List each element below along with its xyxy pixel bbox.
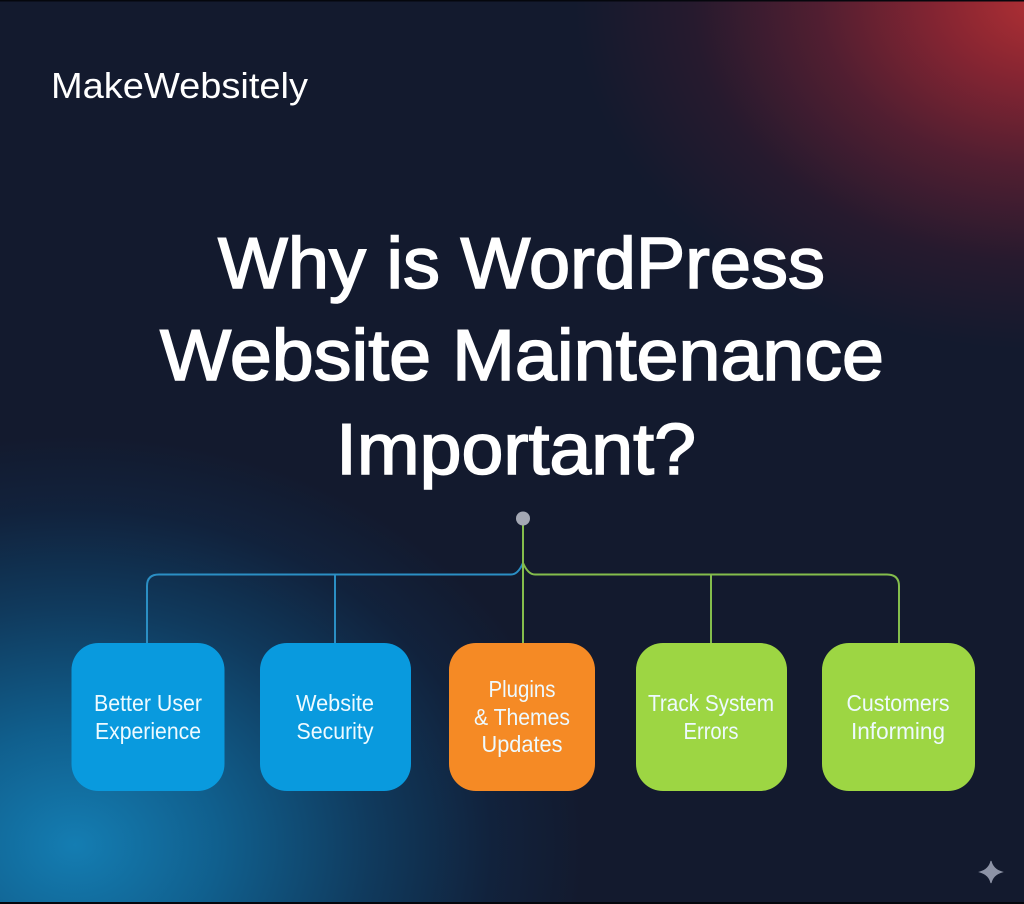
box: Customers Informing: Informing	[851, 718, 945, 744]
box: Website Security: Security	[296, 718, 374, 744]
brand name: MakeWebsitely	[51, 65, 308, 106]
box: Better User Experience: Better User	[94, 690, 202, 716]
box: Track System Errors: Errors	[684, 718, 738, 744]
box: Track System Errors	[636, 643, 787, 791]
box: Better User Experience	[72, 643, 224, 791]
box: Plugins & Themes Updates: Updates	[482, 731, 562, 757]
box: Track System Errors: Track System	[648, 690, 774, 716]
box: Plugins & Themes Updates: Plugins	[488, 676, 556, 702]
connector: green branch	[523, 524, 899, 643]
connector: blue branch	[147, 563, 523, 643]
box: Website Security	[260, 643, 411, 791]
box: Plugins & Themes Updates: & Themes	[474, 704, 570, 730]
icon: sparkle	[980, 861, 1002, 883]
connector tree	[147, 524, 899, 643]
box: Plugins & Themes Updates	[449, 643, 595, 791]
box: Customers Informing: Customers	[846, 690, 950, 716]
box: Better User Experience: Experience	[95, 718, 201, 744]
box: Website Security: Website	[296, 690, 374, 716]
box: Customers Informing	[822, 643, 975, 791]
title: Important?	[336, 410, 696, 490]
title: Why is WordPress	[218, 224, 825, 304]
title	[160, 224, 884, 490]
connector origin dot	[516, 512, 530, 526]
title: Website Maintenance	[160, 316, 884, 396]
